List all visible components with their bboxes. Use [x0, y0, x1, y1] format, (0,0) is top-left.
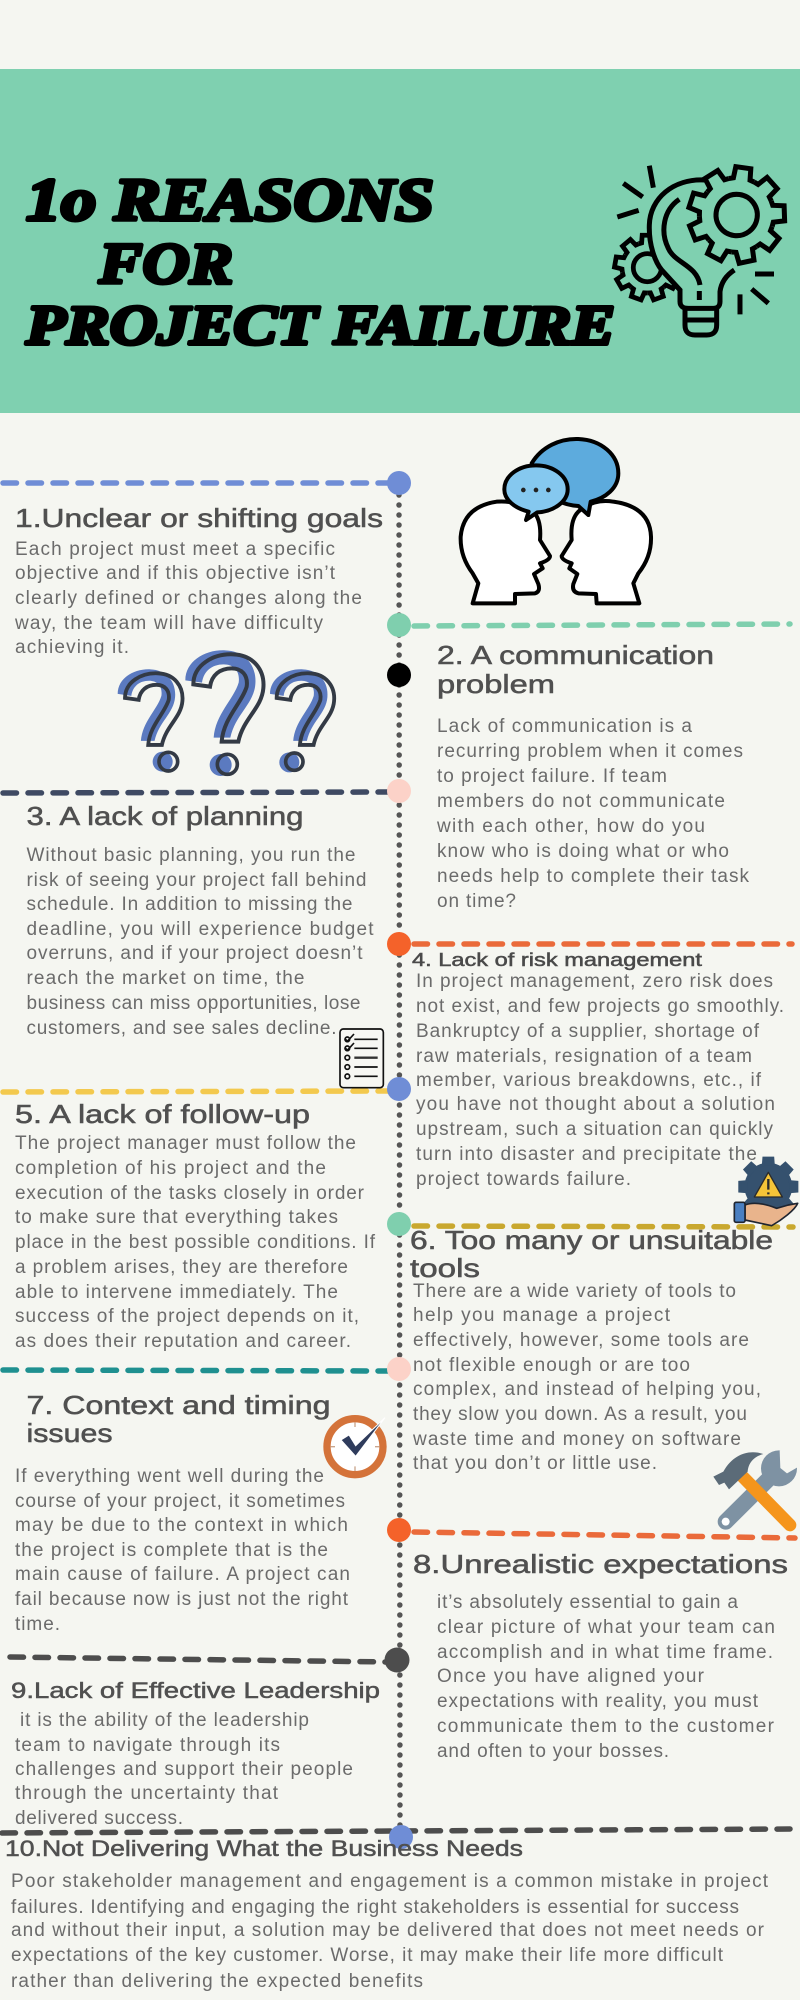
text 5: execution of the tasks closely in order	[15, 1183, 365, 1204]
text 9: challenges and support their people	[15, 1759, 353, 1780]
heading 9: 9.Lack of Effective Leadership	[11, 1678, 380, 1703]
text 2: to project failure. If team	[437, 766, 667, 787]
text 1: way, the team will have difficulty	[14, 613, 324, 634]
text 4: Bankruptcy of a supplier, shortage of	[416, 1021, 760, 1042]
text 2: with each other, how do you	[436, 816, 705, 837]
text 7: If everything went well during the	[15, 1466, 324, 1487]
text 5: able to intervene immediately. The	[15, 1282, 338, 1303]
panel: reason 10	[5, 1836, 769, 1992]
text 2: know who is doing what or who	[437, 841, 729, 862]
text 5: The project manager must follow the	[15, 1133, 356, 1154]
text 8: and often to your bosses.	[437, 1741, 669, 1762]
text 3: schedule. In addition to missing the	[26, 894, 352, 915]
text 7	[15, 1466, 350, 1635]
text 3: Without basic planning, you run the	[26, 845, 356, 866]
title: FOR	[98, 231, 233, 296]
icon: checklist	[340, 1029, 383, 1088]
text 5: as does their reputation and career.	[15, 1331, 351, 1352]
heading 6: tools	[410, 1253, 480, 1283]
panel: reason 7	[15, 1390, 385, 1635]
text 4: raw materials, resignation of a team	[416, 1046, 752, 1067]
icon: two heads talking	[461, 439, 651, 603]
text 3: reach the market on time, the	[26, 968, 304, 989]
text 1	[14, 539, 362, 658]
text 8: Once you have aligned your	[437, 1666, 705, 1687]
text 4: member, various breakdowns, etc., if	[416, 1070, 762, 1091]
panel: reason 5	[15, 1099, 376, 1352]
heading 7: issues	[26, 1418, 112, 1448]
icon: light bulb with gears	[614, 161, 792, 335]
text 9	[15, 1710, 353, 1829]
text 4: upstream, such a situation can quickly	[416, 1119, 774, 1140]
text 3: overruns, and if your project doesn’t	[26, 943, 363, 964]
heading 5: 5. A lack of follow-up	[15, 1099, 310, 1129]
text 8: communicate them to the customer	[437, 1716, 775, 1737]
text 8: expectations with reality, you must	[437, 1691, 759, 1712]
dashed connector lines	[2, 483, 795, 1833]
heading 1: 1.Unclear or shifting goals	[15, 503, 383, 533]
heading 10: 10.Not Delivering What the Business Needs	[5, 1836, 523, 1861]
text 4: In project management, zero risk does	[416, 971, 773, 992]
text 4	[416, 971, 784, 1190]
text 6: complex, and instead of helping you,	[413, 1379, 761, 1400]
text 2: recurring problem when it comes	[437, 741, 743, 762]
text 5	[15, 1133, 376, 1352]
text 10: and without their input, a solution may be delivered that does not meet needs or	[11, 1920, 765, 1941]
icon: question marks	[118, 650, 334, 776]
text 7: may be due to the context in which	[15, 1515, 348, 1536]
text 3: deadline, you will experience budget	[26, 919, 374, 940]
text 3: risk of seeing your project fall behind	[26, 870, 366, 891]
text 3: business can miss opportunities, lose	[26, 993, 360, 1014]
text 2: needs help to complete their task	[437, 866, 750, 887]
text 10: expectations of the key customer. Worse, it may make their life more difficult	[11, 1945, 724, 1966]
text 7: main cause of failure. A project can	[15, 1564, 350, 1585]
heading 4: 4. Lack of risk management	[412, 950, 702, 970]
text 3: customers, and see sales decline.	[26, 1018, 336, 1039]
heading 3: 3. A lack of planning	[26, 801, 304, 831]
text 6: waste time and money on software	[412, 1429, 741, 1450]
text 7: course of your project, it sometimes	[15, 1491, 345, 1512]
text 7: fail because now is just not the right	[15, 1589, 349, 1610]
text 1: objective and if this objective isn’t	[15, 563, 336, 584]
icon: risk warning in hand	[734, 1158, 798, 1226]
panel: reason 1	[14, 503, 383, 776]
heading 2	[437, 640, 714, 699]
text 5: to make sure that everything takes	[15, 1207, 338, 1228]
text 4: you have not thought about a solution	[416, 1094, 775, 1115]
text 6: effectively, however, some tools are	[413, 1330, 749, 1351]
text 6: they slow you down. As a result, you	[413, 1404, 747, 1425]
banner	[0, 69, 800, 413]
text 7: the project is complete that is the	[15, 1540, 328, 1561]
text 5: a problem arises, they are therefore	[15, 1257, 348, 1278]
timeline nodes	[384, 471, 413, 1849]
heading 6	[410, 1225, 773, 1283]
text 9: team to navigate through its	[15, 1735, 280, 1756]
text 4: not exist, and few projects go smoothly.	[416, 996, 784, 1017]
text 9: it is the ability of the leadership	[20, 1710, 309, 1731]
icon: hammer and wrench	[713, 1447, 800, 1526]
heading 7	[26, 1390, 330, 1448]
heading 2: problem	[437, 669, 555, 699]
text 8: accomplish and in what time frame.	[437, 1642, 773, 1663]
text 5: success of the project depends on it,	[15, 1306, 359, 1327]
panel: reason 3	[26, 801, 383, 1088]
icon: clock with check mark	[327, 1418, 385, 1475]
title	[25, 167, 615, 357]
panel: reason 9	[11, 1678, 380, 1829]
text 6: not flexible enough or are too	[413, 1355, 690, 1376]
heading 7: 7. Context and timing	[26, 1390, 330, 1420]
title: 1o REASONS	[26, 167, 434, 233]
text 3	[26, 845, 374, 1039]
text 8: clear picture of what your team can	[437, 1617, 775, 1638]
timeline dotted line	[399, 495, 400, 1835]
text 2: Lack of communication is a	[437, 716, 692, 737]
text 8: it’s absolutely essential to gain a	[437, 1592, 738, 1613]
text 2	[436, 716, 750, 912]
panel: reason 4	[412, 950, 798, 1226]
text 6: help you manage a project	[413, 1305, 671, 1326]
text 6	[412, 1281, 761, 1474]
panel: reason 8	[413, 1549, 788, 1762]
heading 2: 2. A communication	[437, 640, 714, 670]
text 10: failures. Identifying and engaging the right stakeholders is essential for success	[11, 1897, 739, 1918]
heading 6: 6. Too many or unsuitable	[410, 1225, 773, 1255]
panel: reason 2	[436, 640, 750, 912]
text 10	[11, 1871, 769, 1992]
text 1: clearly defined or changes along the	[15, 588, 362, 609]
text 4: turn into disaster and precipitate the	[416, 1144, 757, 1165]
text 7: time.	[15, 1614, 60, 1635]
text 9: through the uncertainty that	[15, 1783, 279, 1804]
panel: reason 6	[410, 1225, 800, 1526]
text 1: Each project must meet a specific	[15, 539, 335, 560]
title: PROJECT FAILURE	[25, 295, 615, 357]
text 6: that you don’t or little use.	[413, 1453, 657, 1474]
heading 8: 8.Unrealistic expectations	[413, 1549, 788, 1579]
text 6: There are a wide variety of tools to	[413, 1281, 736, 1302]
text 2: members do not communicate	[437, 791, 725, 812]
text 4: project towards failure.	[416, 1169, 631, 1190]
text 10: Poor stakeholder management and engagement is a common mistake in project	[11, 1871, 769, 1892]
text 5: place in the best possible conditions. If	[15, 1232, 376, 1253]
text 8	[437, 1592, 775, 1762]
text 5: completion of his project and the	[15, 1158, 326, 1179]
text 2: on time?	[437, 891, 516, 912]
text 1: achieving it.	[15, 637, 129, 658]
text 10: rather than delivering the expected benefits	[11, 1971, 423, 1992]
text 9: delivered success.	[15, 1808, 183, 1829]
